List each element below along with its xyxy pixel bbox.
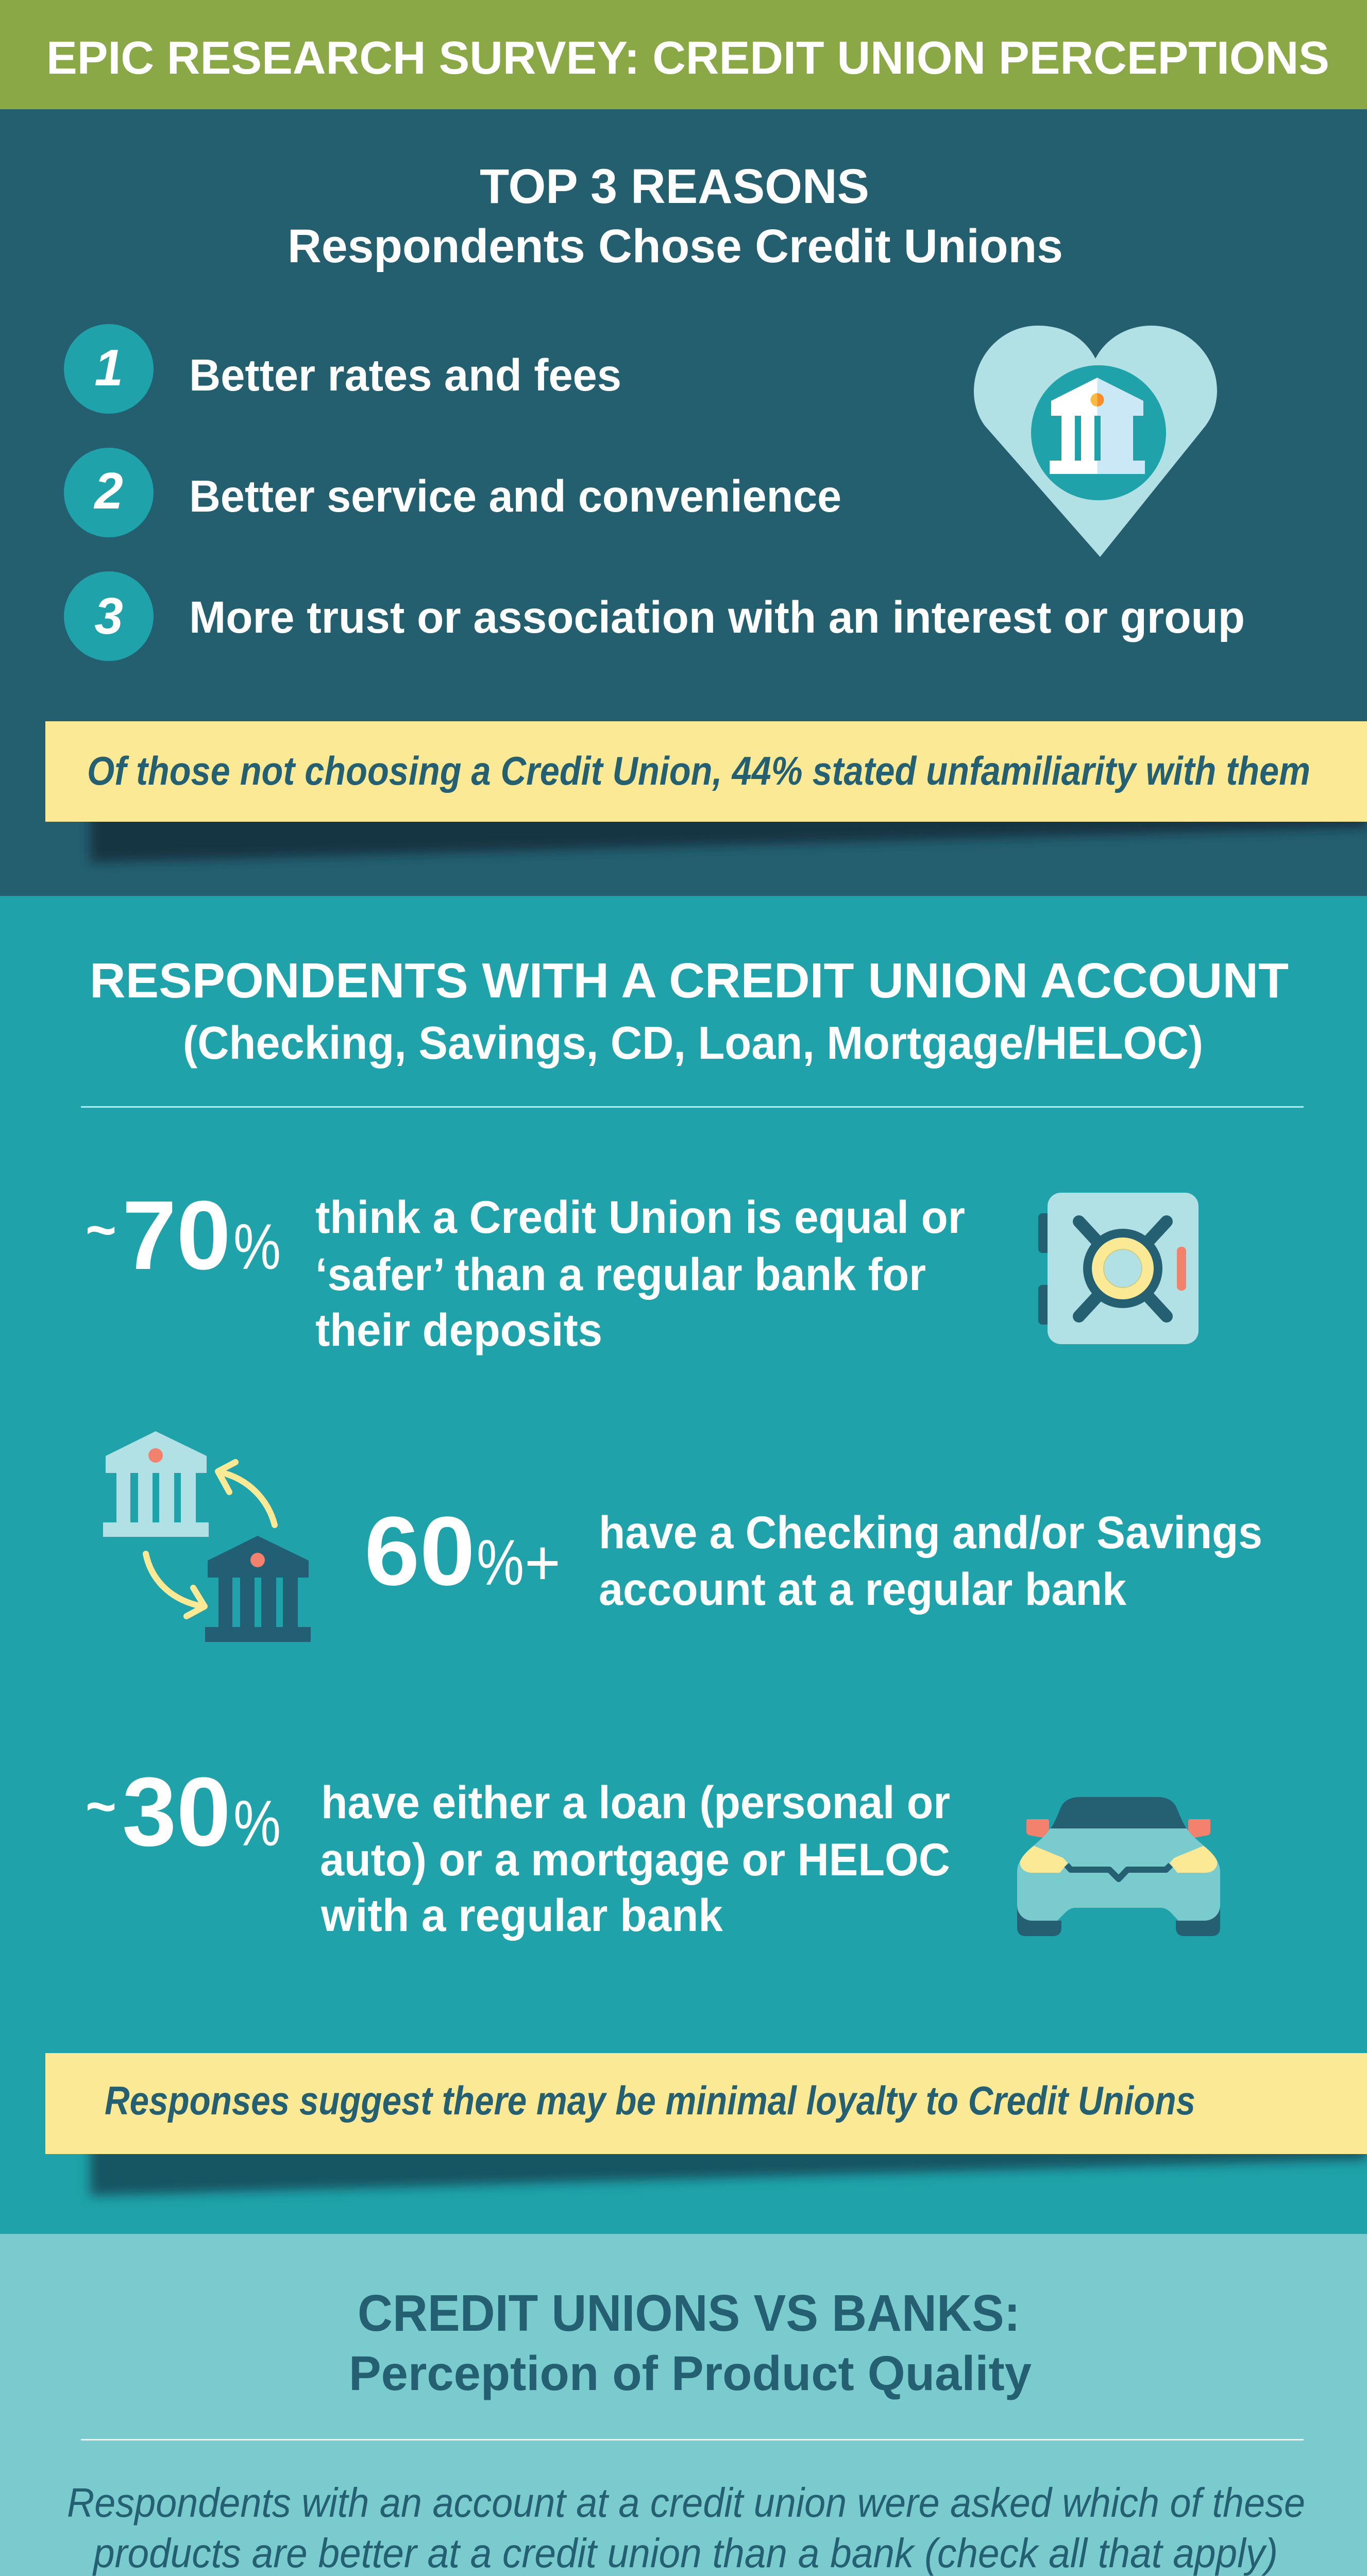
reason 3: 3	[94, 587, 123, 645]
heading: respondents	[90, 953, 1289, 1069]
title banner: EPIC RESEARCH SURVEY: CREDIT UNION PERCEPTIONS	[46, 32, 1329, 84]
heading: product quality: Perception of Product Quality	[349, 2346, 1032, 2401]
text: question wording: products are better at a credit union than a bank (check all that apply)	[92, 2530, 1278, 2576]
heading: top 3 reasons: TOP 3 REASONS	[480, 159, 869, 214]
text: safer deposits: their deposits	[315, 1304, 602, 1355]
reason 1: 1	[94, 339, 123, 397]
stat: about 30 percent: 30	[122, 1757, 231, 1867]
stat: about 70 percent: %	[233, 1211, 281, 1283]
stat: about 30 percent	[86, 1757, 281, 1867]
icon: safe	[1038, 1193, 1199, 1344]
stat: about 70 percent	[86, 1181, 281, 1290]
callout: minimal loyalty: Responses suggest there may be minimal loyalty to Credit Unions	[105, 2078, 1195, 2123]
text: checking or savings: account at a regular bank	[599, 1563, 1126, 1615]
text: safer deposits	[315, 1191, 965, 1355]
heading: respondents: (Checking, Savings, CD, Loan, Mortgage/HELOC)	[183, 1018, 1203, 1069]
stat: 60 percent plus	[364, 1497, 561, 1606]
heading: top 3 reasons	[288, 159, 1063, 273]
text: loan or mortgage: have either a loan (personal or	[321, 1776, 950, 1828]
reason 2	[64, 448, 841, 537]
stat: about 30 percent: ~	[86, 1775, 116, 1838]
reason 2: Better service and convenience	[189, 471, 841, 521]
panel: credit unions vs banks	[0, 2234, 1367, 2576]
callout: minimal loyalty	[45, 2053, 1367, 2196]
text: safer deposits: ‘safer’ than a regular bank for	[315, 1248, 926, 1300]
reason 1	[64, 324, 621, 414]
arrow up	[218, 1462, 275, 1525]
reason 1: Better rates and fees	[189, 350, 621, 400]
reason 3	[64, 571, 1245, 661]
stat: about 70 percent: ~	[86, 1198, 116, 1262]
stat: 60 percent plus: %	[477, 1527, 524, 1599]
reason 2: 2	[93, 462, 123, 520]
text: loan or mortgage: auto) or a mortgage or HELOC	[320, 1834, 950, 1885]
dark bank	[205, 1536, 311, 1642]
stat: 60 percent plus: +	[525, 1527, 561, 1599]
heading: top 3 reasons: Respondents Chose Credit Unions	[288, 220, 1063, 273]
stat: 60 percent plus: 60	[364, 1497, 475, 1606]
arrow down	[146, 1554, 205, 1616]
text: checking or savings	[599, 1506, 1262, 1615]
reason 3: More trust or association with an interest or group	[189, 592, 1245, 642]
text: checking or savings: have a Checking and/or Savings	[599, 1506, 1262, 1558]
heading: respondents: RESPONDENTS WITH A CREDIT UNION ACCOUNT	[90, 953, 1289, 1008]
heading: product quality	[349, 2284, 1032, 2401]
stat: about 70 percent: 70	[122, 1181, 231, 1290]
panel: respondents with a credit union account	[0, 896, 1367, 2234]
heading: product quality: CREDIT UNIONS VS BANKS:	[358, 2284, 1020, 2342]
light bank	[103, 1431, 209, 1537]
icon: heart with bank	[974, 326, 1217, 557]
title banner	[0, 0, 1367, 109]
text: safer deposits: think a Credit Union is equal or	[315, 1191, 965, 1243]
stat: about 30 percent: %	[233, 1788, 281, 1859]
icon: car	[1017, 1797, 1220, 1936]
callout: unfamiliarity	[45, 721, 1367, 862]
text: loan or mortgage	[320, 1776, 950, 1941]
text: question wording	[67, 2480, 1305, 2576]
panel: top 3 reasons	[0, 109, 1367, 896]
icon: two banks with arrows	[103, 1431, 311, 1642]
text: loan or mortgage: with a regular bank	[320, 1889, 723, 1941]
